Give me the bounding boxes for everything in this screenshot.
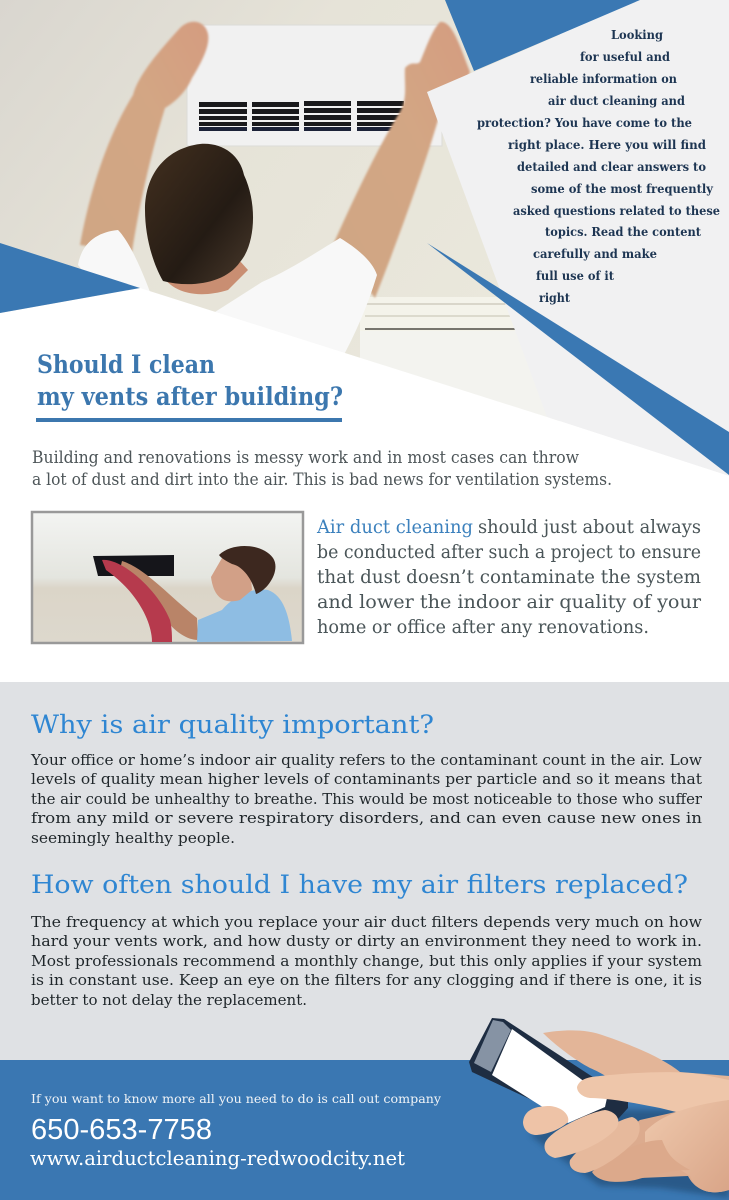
vent cover — [187, 25, 442, 146]
palm behind the fingers — [600, 1100, 729, 1192]
light intro panel — [427, 0, 729, 476]
intro text: right — [539, 290, 570, 305]
heading underline — [36, 418, 342, 422]
side paragraph: should just about always — [478, 517, 701, 538]
ceiling opening — [93, 555, 174, 576]
heading: should I clean: Should I clean — [37, 350, 215, 379]
intro text: Looking — [611, 27, 663, 42]
lower finger one — [544, 1110, 618, 1158]
red hose — [102, 560, 172, 642]
intro text: full use of it — [536, 268, 614, 283]
man's right arm — [333, 22, 470, 298]
side paragraph: and lower the indoor air quality of your — [317, 592, 701, 613]
answer: air filters: The frequency at which you replace your air duct filters depends very much on how — [31, 913, 702, 931]
icon: hands holding a smartphone — [469, 1018, 729, 1198]
right hand back — [645, 1100, 729, 1192]
answer: air quality — [30, 751, 703, 847]
white content panel — [0, 288, 729, 690]
intro text: protection? You have come to the — [477, 115, 692, 130]
technician's shirt — [197, 590, 292, 642]
wall moulding — [360, 297, 550, 431]
neck — [158, 250, 248, 294]
lead paragraph — [32, 448, 612, 489]
intro text: topics. Read the content — [545, 224, 701, 239]
technician's arm — [118, 561, 198, 640]
answer: air filters: Most professionals recommend a monthly change, but this only applies if your system — [31, 952, 702, 970]
intro text: carefully and make — [533, 246, 657, 261]
intro text: reliable information on — [530, 71, 677, 86]
index finger — [577, 1072, 729, 1125]
blue triangle left — [0, 243, 140, 313]
hand shadow — [530, 1110, 729, 1198]
side paragraph: that dust doesn’t contaminate the system — [317, 567, 701, 588]
answer: air filters — [31, 913, 702, 1009]
footer band — [0, 1060, 729, 1200]
blue diagonal sliver — [427, 243, 729, 475]
answer: air quality: seemingly healthy people. — [31, 829, 235, 847]
intro text: for useful and — [580, 49, 670, 64]
white t-shirt — [78, 230, 377, 362]
heading: should I clean: my vents after building? — [37, 382, 343, 411]
phone top bezel — [474, 1020, 511, 1072]
answer: air quality: the air could be unhealthy to breathe. This would be most noticeable to those who suffer — [31, 790, 703, 808]
intro text: right place. Here you will find — [508, 137, 706, 152]
side paragraph: Air duct cleaning — [316, 517, 473, 538]
blue triangle top — [445, 0, 640, 71]
technician's hair — [219, 546, 275, 594]
lower finger two — [570, 1117, 640, 1173]
intro text: some of the most frequently — [531, 181, 714, 196]
phone screen — [492, 1029, 607, 1123]
intro text: air duct cleaning and — [548, 93, 685, 108]
intro text — [477, 27, 720, 305]
man's left arm — [80, 22, 208, 252]
answer: air quality: levels of quality mean higher levels of contaminants per particle and so it means that — [31, 770, 702, 788]
website: www.airductcleaning-redwoodcity.net — [30, 1147, 405, 1170]
phone body — [469, 1018, 628, 1132]
upper finger — [543, 1030, 729, 1110]
side paragraph — [316, 517, 701, 638]
hero photo: man fitting a wall vent — [0, 0, 560, 431]
answer: air filters: hard your vents work, and how dusty or dirty an environment they need to work in. — [31, 932, 702, 950]
heading: air filters: How often should I have my air filters replaced? — [31, 870, 688, 899]
heading: should I clean — [37, 350, 343, 411]
lead paragraph: Building and renovations is messy work and in most cases can throw — [32, 448, 579, 467]
photo: technician cleaning a ceiling duct — [32, 512, 303, 643]
answer: air quality: from any mild or severe respiratory disorders, and can even cause new ones in — [31, 809, 702, 827]
phone number: 650-653-7758 — [31, 1114, 212, 1146]
side paragraph: be conducted after such a project to ensure — [317, 542, 701, 563]
thumb — [523, 1106, 568, 1135]
intro text: detailed and clear answers to — [517, 159, 706, 174]
hair — [145, 144, 253, 284]
lead paragraph: a lot of dust and dirt into the air. This is bad news for ventilation systems. — [32, 470, 612, 489]
heading: why is air quality important: Why is air quality important? — [31, 710, 434, 739]
lower finger three — [592, 1140, 690, 1182]
answer: air filters: better to not delay the replacement. — [31, 991, 307, 1009]
technician's head — [211, 558, 252, 601]
grey FAQ panel — [0, 682, 729, 1060]
answer: air filters: is in constant use. Keep an eye on the filters for any clogging and if there is one, it is — [31, 971, 702, 989]
answer: air quality: Your office or home’s indoor air quality refers to the contaminant count in the air. Low — [30, 751, 702, 769]
side paragraph: home or office after any renovations. — [317, 617, 649, 638]
footer call to action: If you want to know more all you need to do is call out company — [31, 1091, 442, 1106]
